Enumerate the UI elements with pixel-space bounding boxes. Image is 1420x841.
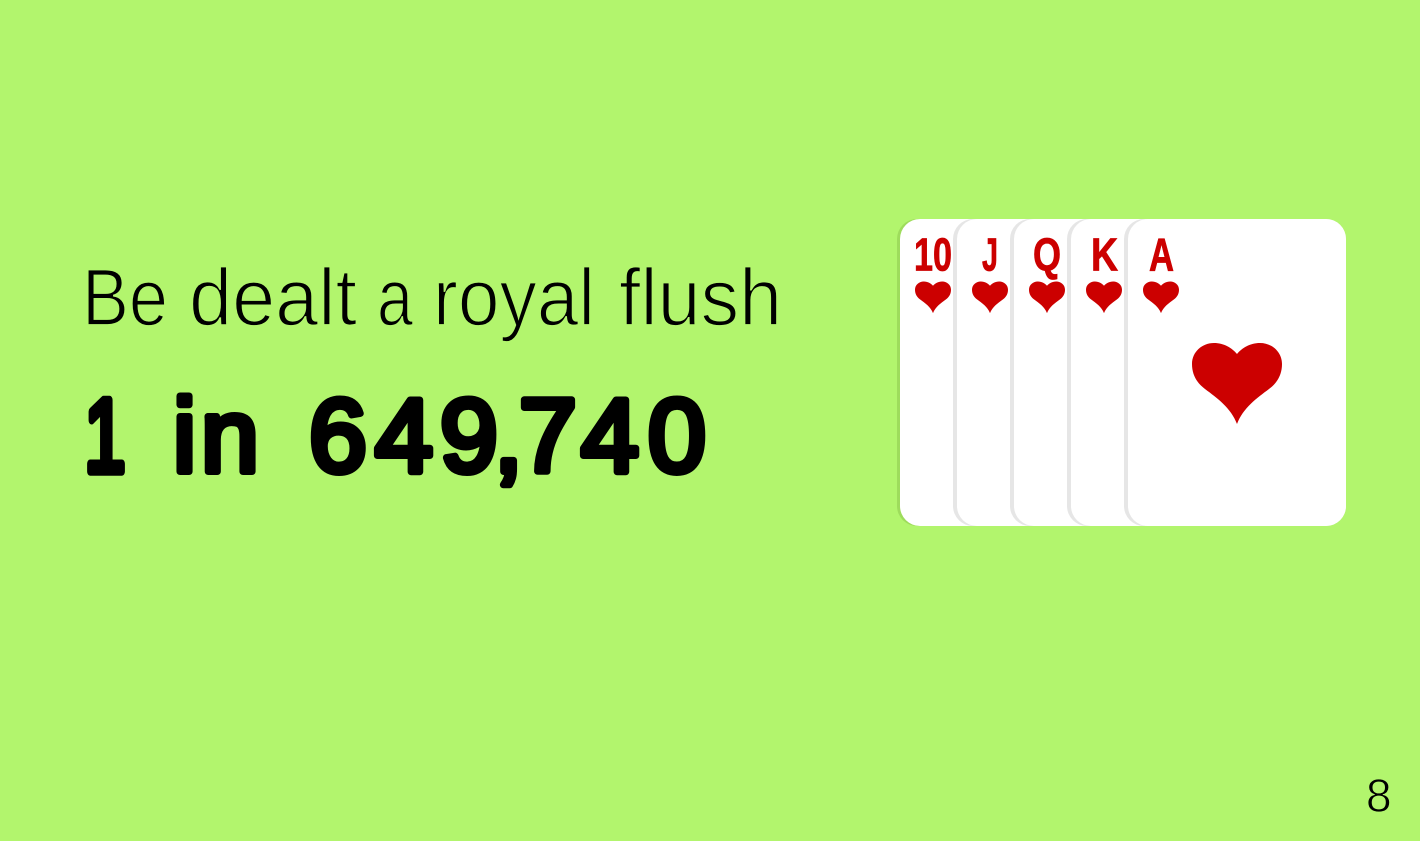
card: 10 of hearts xyxy=(897,219,1020,526)
card: jack of hearts: J xyxy=(982,228,998,280)
heading: event: flush xyxy=(619,253,782,343)
heading: event: Be xyxy=(82,253,168,343)
card: 10 of hearts: 10 xyxy=(914,228,952,280)
heading: event: dealt xyxy=(189,253,357,343)
icon: large heart xyxy=(1192,343,1282,424)
card: ace of hearts xyxy=(1124,219,1346,526)
card: jack of hearts xyxy=(953,219,1077,526)
odds figure: in 649,740 xyxy=(173,378,706,494)
odds figure: 1 xyxy=(84,378,126,494)
playing cards: royal flush xyxy=(897,219,1346,526)
card: ace of hearts: A xyxy=(1149,228,1174,280)
heading: event xyxy=(82,253,782,343)
card: king of hearts xyxy=(1067,219,1191,526)
heading: event: a xyxy=(377,253,414,343)
card: queen of hearts: Q xyxy=(1033,228,1061,280)
card: queen of hearts xyxy=(1010,219,1134,526)
card: king of hearts: K xyxy=(1091,228,1118,280)
page number: 8 xyxy=(1366,770,1392,822)
heading: event: royal xyxy=(433,253,595,343)
